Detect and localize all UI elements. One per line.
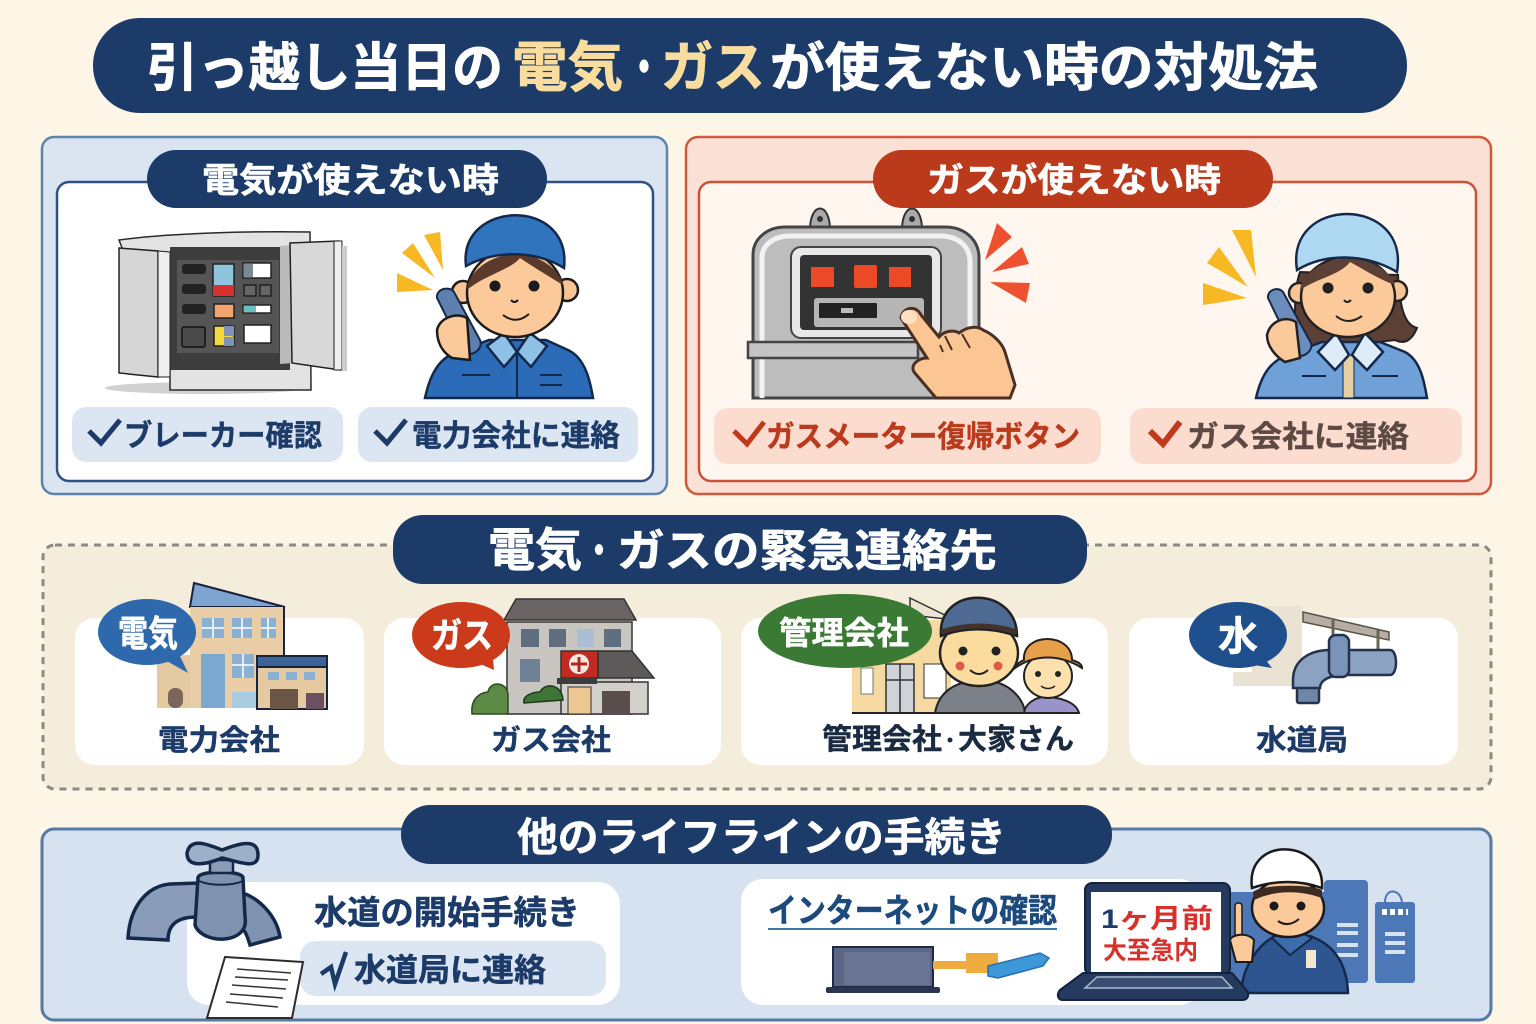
chip: contact power company [358,407,638,462]
heading: emergency contacts: 電気 [488,524,582,576]
title banner: ガス [661,38,765,98]
speech bubble: gas [412,602,510,670]
speech bubble: water: 水 [1218,615,1258,659]
card: power company [75,583,364,765]
chip: breaker check: ブレーカー確認 [124,419,322,453]
speech bubble: electricity [98,599,196,673]
speech bubble: water [1189,602,1287,668]
chip: contact power company: 電力会社に連絡 [412,420,620,453]
chip: contact water bureau: 水道局に連絡 [354,952,546,988]
panel: emergency contacts [43,515,1491,789]
speech bubble: gas: ガス [431,617,493,656]
icon: gas company building [472,599,654,714]
label: management company and landlord: 管理会社 [822,723,942,756]
card: water procedure: 水道の開始手続き [314,894,580,931]
icon: laptop: 大至急内 [1103,937,1198,965]
speech bubble: electricity: 電気 [118,613,178,654]
chip: contact water bureau [300,941,606,996]
chip: gas meter reset: ガスメーター復帰ボタン [766,421,1080,454]
card: internet check [741,879,1201,1005]
icon: router and cable [826,947,1049,993]
title banner: ・ [626,40,662,98]
card: waterworks: 水道局 [1256,724,1348,757]
heading: electricity: 電気が使えない時 [202,161,499,200]
card: management company [741,594,1108,765]
heading: electricity [147,150,547,208]
label: management company and landlord: 大家さん [958,723,1074,756]
icon: city buildings [1230,880,1415,983]
icon: breaker box [105,232,347,394]
title banner: 引っ越し当日の [147,40,503,98]
card: internet check: インターネットの確認 [768,892,1057,929]
heading: other lifelines [401,805,1112,864]
chip: contact gas company [1130,408,1462,464]
icon: laptop [1058,883,1248,1000]
icon: woman on the phone [1203,214,1427,398]
card: water procedure [187,882,620,1005]
icon: water faucet and building [1233,606,1396,703]
title banner: 電気 [512,38,623,98]
title banner: が使えない時の対処法 [770,40,1318,98]
heading: emergency contacts: ・ [583,528,615,576]
card: power company: 電力会社 [158,724,280,757]
panel: gas unavailable [686,137,1491,494]
icon: laptop: 1ヶ月前 [1101,904,1213,934]
chip: contact gas company: ガス会社に連絡 [1187,421,1409,454]
icon: technician with finger up [1230,849,1348,993]
title banner [93,18,1407,113]
card: waterworks [1129,602,1458,765]
icon: power company building [157,583,327,709]
heading: gas [873,150,1273,208]
panel: electricity unavailable [42,137,667,494]
icon: worker on the phone [397,215,593,398]
card: gas company [384,599,721,765]
icon: landlord and house [852,598,1082,713]
icon: large faucet [128,843,280,945]
icon: document [207,957,303,1018]
speech bubble: management: 管理会社 [779,615,909,651]
panel: other lifelines [42,805,1491,1020]
label: management company and landlord [822,723,1074,756]
heading: emergency contacts [393,515,1087,584]
chip: breaker check [72,407,343,462]
speech bubble: management [758,594,932,668]
heading: gas: ガスが使えない時 [927,161,1221,200]
heading: emergency contacts: ガスの緊急連絡先 [617,527,997,576]
heading: other lifelines: 他のライフラインの手続き [517,816,1006,860]
chip: gas meter reset [714,408,1101,464]
icon: gas meter with hand [748,208,1030,398]
card: gas company: ガス会社 [491,724,611,757]
